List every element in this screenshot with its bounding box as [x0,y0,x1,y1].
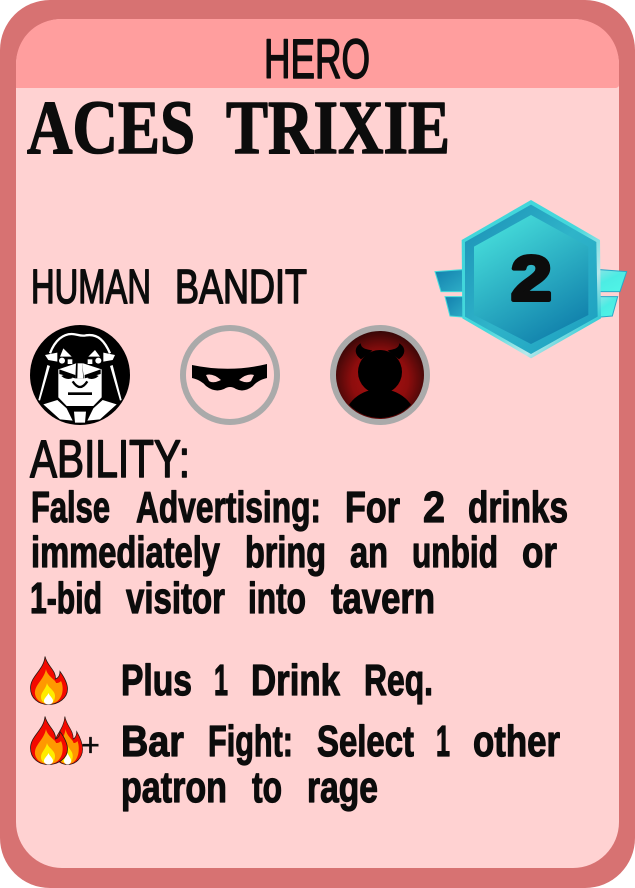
rage two effect: Select [317,717,414,766]
rage one effect: Plus [121,656,192,705]
icon: single flame [30,656,68,704]
race and class [31,261,307,314]
hero name title [27,86,450,170]
ability description: tavern [331,574,435,623]
ability description: unbid [412,528,498,577]
hexagon face [474,215,588,344]
left wings [435,269,467,317]
ability description: False [31,483,110,532]
right wings [596,269,627,317]
ability description: into [248,574,306,623]
icon: double flame plus: + [81,727,100,763]
rage one effect: Drink [251,656,340,705]
rage one effect [121,656,433,705]
header band [16,19,619,88]
rage two effect: to [252,763,282,812]
hexagon frame [462,200,601,358]
rage one effect: 1 [214,656,228,705]
hero name title: TRIXIE [226,86,450,170]
level number: 2 [511,244,552,314]
ability description: an [350,528,388,577]
rage two effect: Bar [121,717,184,766]
icon: bandit mask [183,328,277,422]
ability description: or [522,528,557,577]
ability description: 2 [423,483,445,532]
rage two effect [121,717,560,812]
rage two effect: 1 [436,717,450,766]
card type heading: HERO [264,27,370,90]
rage one effect: Req. [364,656,433,705]
icon: human face [30,325,130,425]
rage two effect: patron [121,763,227,812]
ability description [30,483,568,623]
ability description: immediately [31,528,220,577]
level badge [435,200,627,358]
rage two effect: Fight: [208,717,293,766]
ability description: drinks [468,483,568,532]
race and class: HUMAN [31,261,151,314]
icon: devil silhouette [330,325,430,425]
ability description: visitor [126,574,225,623]
ability description: Advertising: [136,483,321,532]
ability description: 1-bid [30,574,102,623]
ability label: ABILITY: [30,430,190,489]
race and class: BANDIT [175,261,307,314]
icon: double flame plus [30,716,100,764]
ability description: For [345,483,400,532]
hero name title: ACES [27,86,195,170]
rage two effect: rage [307,763,378,812]
ability description: bring [245,528,326,577]
rage two effect: other [473,717,560,766]
